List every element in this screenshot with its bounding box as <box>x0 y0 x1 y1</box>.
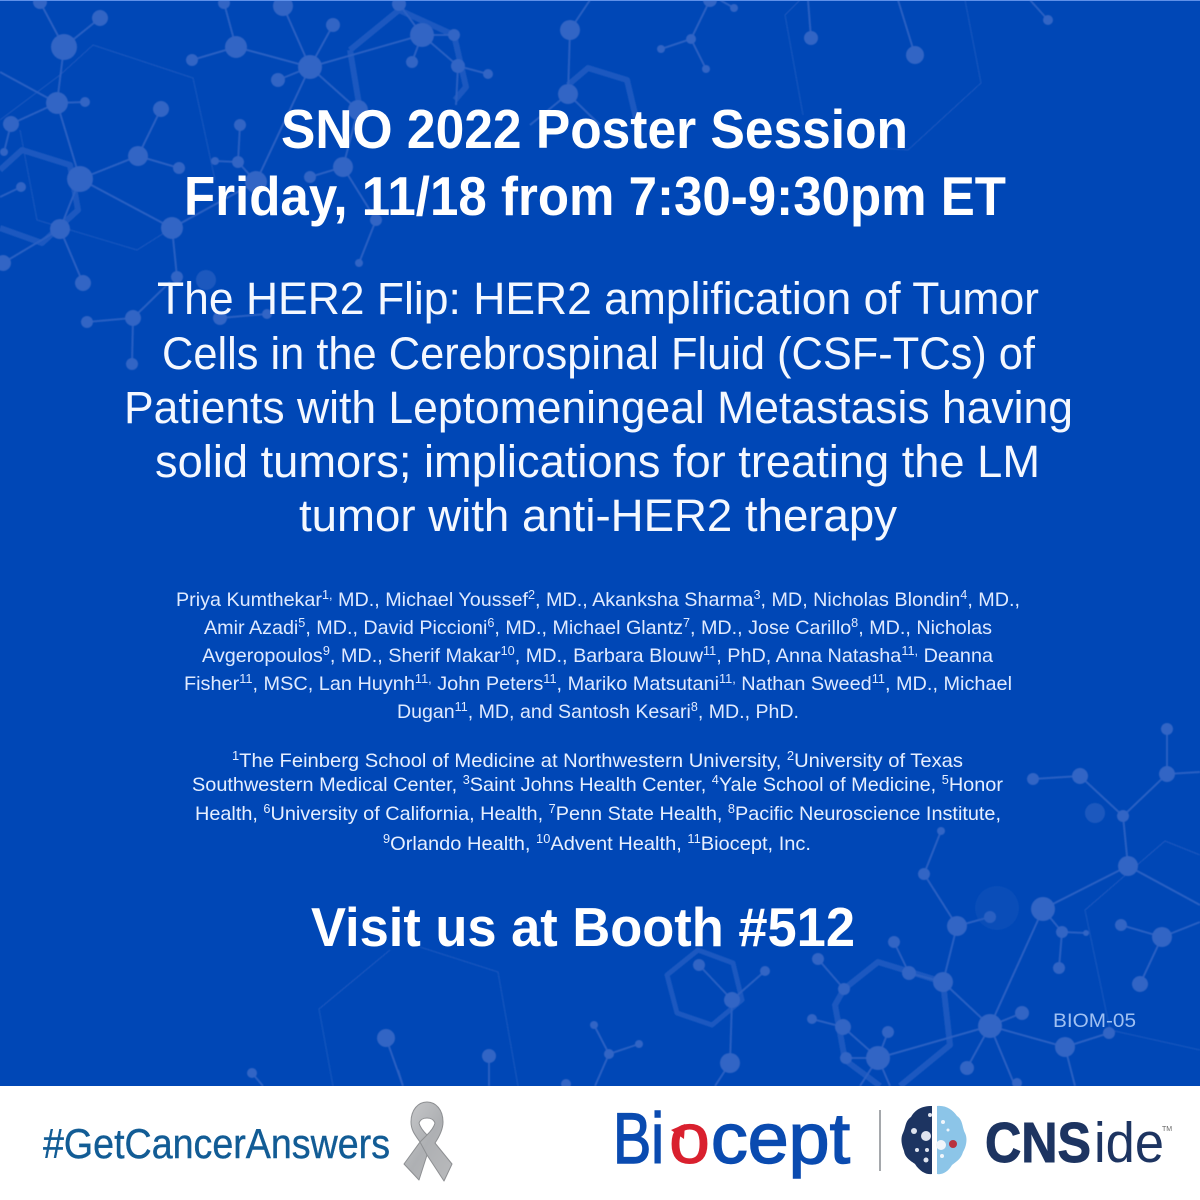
poster title text block: tumor with anti-HER2 therapy <box>299 490 898 541</box>
white footer band <box>0 1086 1200 1200</box>
booth callout: Visit us at Booth #512 <box>311 896 855 958</box>
authors text block: , MD., Michael Glantz <box>494 617 683 639</box>
logo: CNSide wordmark <box>985 1111 1172 1175</box>
title: Friday, 11/18 from 7:30-9:30pm ET <box>184 165 1006 227</box>
affiliations text block: 9 <box>383 832 390 846</box>
authors text block: , MD., Nicholas <box>858 617 992 639</box>
title <box>184 98 1006 227</box>
logo divider <box>879 1110 881 1171</box>
affiliations text block: University of Texas <box>794 750 963 772</box>
affiliations text block: Southwestern Medical Center, <box>192 774 452 796</box>
affiliations text block: University of California, Health, <box>271 803 549 825</box>
authors text block: 10 <box>501 644 515 658</box>
authors text block: 4 <box>960 588 967 602</box>
authors text block: , MD., PhD. <box>698 701 799 723</box>
authors text block: Nathan Sweed <box>736 673 872 695</box>
affiliations text block <box>192 749 1004 855</box>
affiliations text block: Biocept, Inc. <box>701 833 811 855</box>
affiliations text block: Orlando Health, <box>390 833 536 855</box>
authors text block: 6 <box>487 616 494 630</box>
logo: CNSide brain icon <box>901 1106 966 1174</box>
poster title text block: Cells in the Cerebrospinal Fluid (CSF-TCs) of <box>162 328 1035 379</box>
authors text block: Amir Azadi <box>204 617 297 639</box>
authors text block: 9 <box>323 644 330 658</box>
authors text block: 11, <box>415 672 432 686</box>
authors text block: Fisher <box>184 673 238 695</box>
icon: awareness ribbon <box>404 1102 452 1181</box>
affiliations text block: 2 <box>787 749 794 763</box>
authors text block: Deanna <box>918 645 993 667</box>
hashtag: #GetCancerAnswers <box>43 1120 390 1167</box>
authors text block <box>176 588 1020 723</box>
affiliations text block: 7 <box>549 802 556 816</box>
authors text block: , Mariko Matsutani <box>557 673 719 695</box>
authors text block: , MD, and Santosh Kesari <box>468 701 691 723</box>
authors text block: , MD., Sherif Makar <box>330 645 501 667</box>
affiliations text block: Advent Health, <box>550 833 687 855</box>
authors text block: , MD., <box>967 589 1020 611</box>
logo: CNSide wordmark: TM <box>1162 1126 1172 1133</box>
poster title text block: Patients with Leptomeningeal Metastasis having <box>124 382 1073 433</box>
authors text block: MD., Michael Youssef <box>333 589 529 611</box>
affiliations text block: Yale School of Medicine, <box>719 774 942 796</box>
authors text block: John Peters <box>432 673 544 695</box>
authors text block: Dugan <box>397 701 454 723</box>
document code: BIOM-05 <box>1053 1011 1136 1032</box>
authors text block: 8 <box>851 616 858 630</box>
authors text block: 5 <box>298 616 305 630</box>
authors text block: Priya Kumthekar <box>176 589 320 611</box>
authors text block: 11, <box>719 672 736 686</box>
logo: Biocept <box>613 1100 850 1179</box>
authors text block: 11 <box>239 672 253 686</box>
authors text block: 1, <box>322 588 333 602</box>
affiliations text block: 10 <box>536 832 550 846</box>
affiliations text block: 4 <box>712 773 719 787</box>
poster title text block <box>124 273 1073 541</box>
authors text block: 11 <box>543 672 557 686</box>
affiliations text block: 5 <box>942 773 949 787</box>
authors text block: 11 <box>703 644 716 658</box>
authors text block: , PhD, Anna Natasha <box>716 645 901 667</box>
authors text block: , MD, Nicholas Blondin <box>761 589 960 611</box>
logo: Biocept: cept <box>711 1100 850 1179</box>
authors text block: Avgeropoulos <box>202 645 321 667</box>
authors text block: , MSC, Lan Huynh <box>252 673 415 695</box>
top edge highlight <box>0 0 1200 1</box>
authors text block: 11, <box>901 644 918 658</box>
affiliations text block: Saint Johns Health Center, <box>470 774 712 796</box>
affiliations text block: Honor <box>949 774 1004 796</box>
authors text block: , MD., David Piccioni <box>305 617 487 639</box>
authors text block: , MD., Barbara Blouw <box>515 645 704 667</box>
poster title text block: The HER2 Flip: HER2 amplification of Tumor <box>157 273 1039 324</box>
logo: CNSide wordmark: CNS <box>985 1111 1091 1175</box>
authors text block: , MD., Jose Carillo <box>690 617 851 639</box>
logo: CNSide wordmark: ide <box>1094 1111 1164 1175</box>
authors text block: 7 <box>683 616 690 630</box>
affiliations text block: Health, <box>195 803 257 825</box>
authors text block: , MD., Michael <box>885 673 1012 695</box>
authors text block: 3 <box>753 588 761 602</box>
affiliations text block: 6 <box>263 802 271 816</box>
affiliations text block: Penn State Health, <box>556 803 728 825</box>
title: SNO 2022 Poster Session <box>281 98 908 160</box>
affiliations text block: 11 <box>687 832 701 846</box>
logo: Biocept: o <box>669 1100 710 1179</box>
poster title text block: solid tumors; implications for treating the LM <box>155 436 1040 487</box>
affiliations text block: 1 <box>232 749 239 763</box>
affiliations text block: The Feinberg School of Medicine at Northwestern University, <box>239 750 787 772</box>
authors text block: 8 <box>691 700 698 714</box>
affiliations text block: 8 <box>728 802 735 816</box>
authors text block: , MD., Akanksha Sharma <box>535 589 754 611</box>
logo: Biocept: Bi <box>613 1100 664 1179</box>
authors text block: 11 <box>872 672 885 686</box>
authors text block: 2 <box>528 588 535 602</box>
affiliations text block: 3 <box>463 773 470 787</box>
authors text block: 11 <box>455 700 468 714</box>
affiliations text block: Pacific Neuroscience Institute, <box>735 803 1001 825</box>
